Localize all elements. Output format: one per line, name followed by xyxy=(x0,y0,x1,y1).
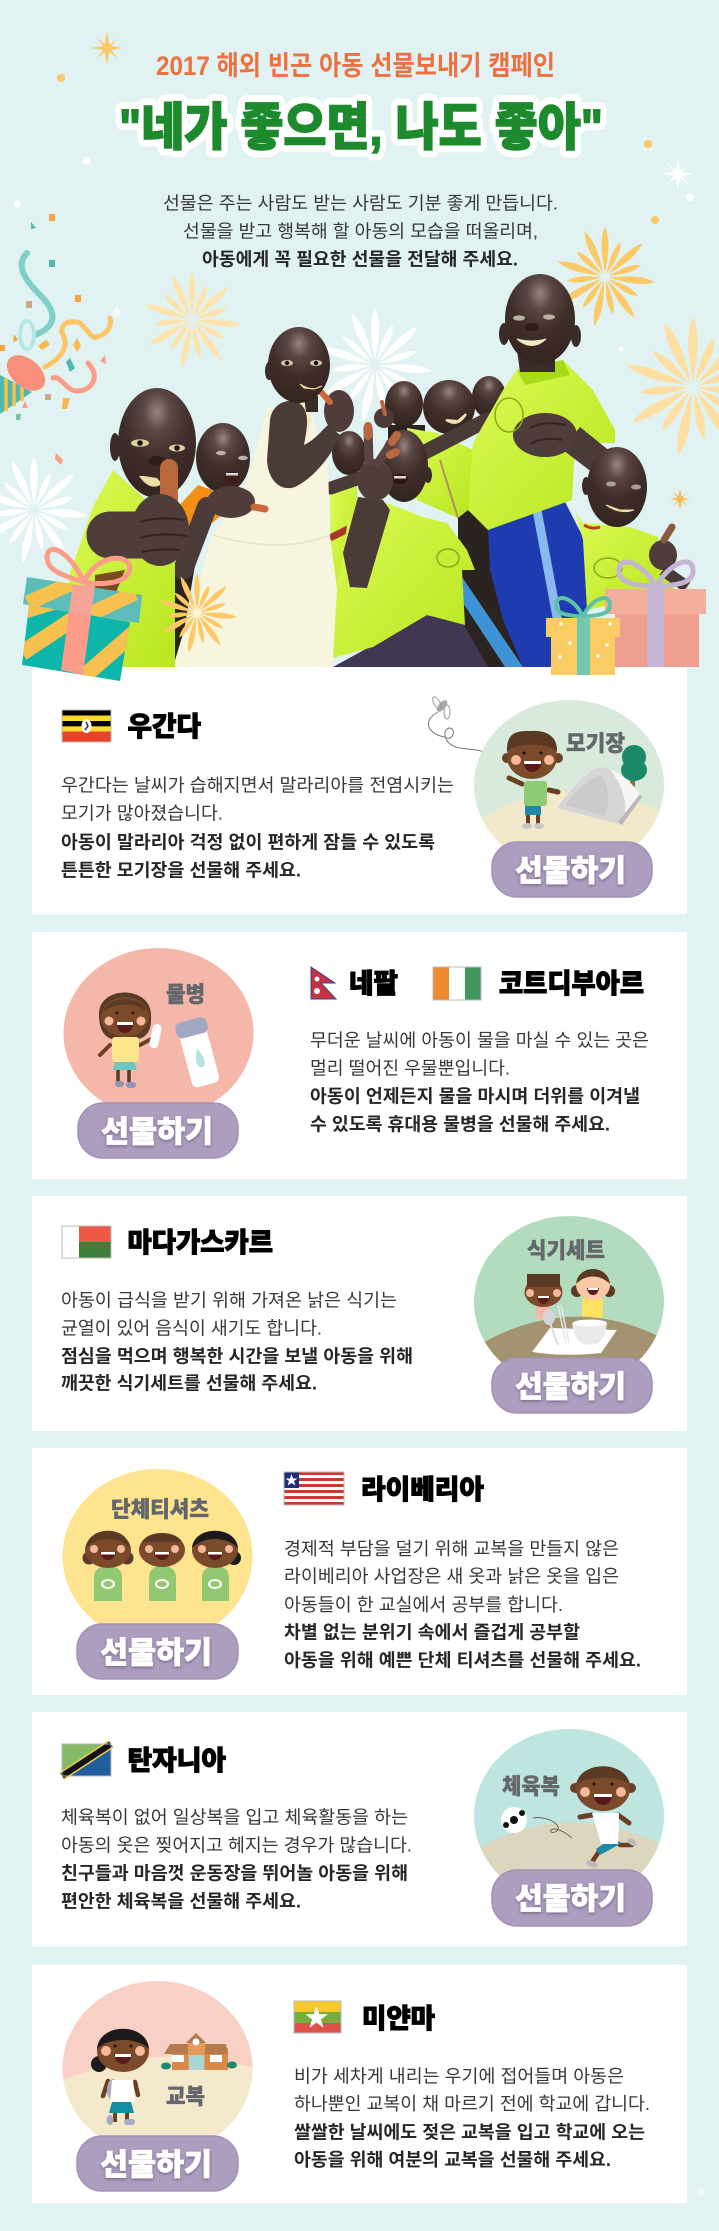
kid in white dress xyxy=(173,327,354,667)
gift: yellow box xyxy=(546,598,620,675)
body text: Liberia: 아동들이 한 교실에서 공부를 합니다. xyxy=(284,1595,563,1615)
school building xyxy=(161,2033,237,2070)
button: 선물하기 xyxy=(100,2149,212,2182)
body text: Nepal and Cote d'Ivoire: 무더운 날씨에 아동이 물을 마실 수 있는 곳은 xyxy=(310,1030,649,1050)
button: 선물하기 xyxy=(515,1371,626,1404)
label: 단체티셔츠 xyxy=(111,1497,209,1522)
heading: Cote d'Ivoire: 코트디부아르 xyxy=(499,969,644,999)
icon: mosquito with flight trail xyxy=(428,695,488,754)
body text: Liberia: 차별 없는 분위기 속에서 즐겁게 공부할 xyxy=(284,1622,580,1642)
campaign title: 2017 해외 빈곤 아동 선물보내기 캠페인 xyxy=(156,51,555,81)
label: 체육복 xyxy=(502,1774,560,1799)
flag: Cote d'Ivoire xyxy=(433,967,481,1000)
card: Uganda xyxy=(32,667,687,914)
group photo of children xyxy=(68,274,687,667)
body text: Uganda xyxy=(61,776,454,880)
heading: Myanmar: 미얀마 xyxy=(362,2004,435,2034)
body text: Tanzania: 체육복이 없어 일상복을 입고 체육활동을 하는 xyxy=(61,1808,408,1828)
button xyxy=(77,2136,238,2191)
label: 교복 xyxy=(166,2084,205,2109)
body text: Liberia xyxy=(284,1539,641,1670)
confetti popper and streamers xyxy=(0,214,110,465)
flag: Nepal xyxy=(311,967,336,999)
body text: Madagascar xyxy=(61,1290,413,1394)
illustration: water bottle xyxy=(64,948,254,1158)
body text: Nepal and Cote d'Ivoire xyxy=(310,1030,649,1134)
body text: Tanzania: 편안한 체육복을 선물해 주세요. xyxy=(61,1892,301,1912)
soccer ball xyxy=(501,1807,572,1838)
body text: Madagascar: 아동이 급식을 받기 위해 가져온 낡은 식기는 xyxy=(61,1290,397,1310)
button xyxy=(78,1103,238,1158)
flag: Madagascar xyxy=(62,1226,111,1258)
three children xyxy=(82,1531,241,1601)
label: 식기세트 xyxy=(527,1238,605,1263)
body text: Uganda: 우간다는 날씨가 습해지면서 말라리아를 전염시키는 xyxy=(61,776,454,796)
body text: Nepal and Cote d'Ivoire: 수 있도록 휴대용 물병을 선물해 주세요. xyxy=(310,1114,610,1134)
button xyxy=(492,842,652,897)
intro text: 아동에게 꼭 필요한 선물을 전달해 주세요. xyxy=(202,250,518,270)
illustration: gym clothes xyxy=(474,1729,664,1926)
tall kid xyxy=(468,274,617,667)
body text: Madagascar: 점심을 먹으며 행복한 시간을 보낼 아동을 위해 xyxy=(61,1346,413,1366)
heading: Uganda: 우간다 xyxy=(128,712,201,742)
illustration: group t-shirts xyxy=(62,1469,252,1679)
child running xyxy=(570,1766,638,1869)
heading: Nepal: 네팔 xyxy=(349,969,398,999)
card: Nepal and Cote d'Ivoire xyxy=(32,932,687,1179)
gift: striped box xyxy=(20,549,142,681)
card: Madagascar xyxy=(32,1196,687,1431)
kids in the back row xyxy=(330,376,506,610)
body text: Tanzania: 아동의 옷은 찢어지고 헤지는 경우가 많습니다. xyxy=(61,1836,412,1856)
intro text xyxy=(163,194,558,270)
body text: Madagascar: 균열이 있어 음식이 새기도 합니다. xyxy=(61,1318,322,1338)
body text: Madagascar: 깨끗한 식기세트를 선물해 주세요. xyxy=(61,1374,317,1394)
child xyxy=(502,731,563,829)
illustration: tableware set xyxy=(474,1216,664,1413)
button xyxy=(492,1358,652,1413)
body text: Liberia: 아동을 위해 예쁜 단체 티셔츠를 선물해 주세요. xyxy=(284,1650,641,1670)
card: Myanmar xyxy=(32,1965,687,2203)
body text: Uganda: 모기가 많아졌습니다. xyxy=(61,804,223,824)
tree xyxy=(621,745,647,793)
body text: Myanmar: 하나뿐인 교복이 채 마르기 전에 학교에 갑니다. xyxy=(294,2094,650,2114)
card: Tanzania xyxy=(32,1712,687,1946)
label: 모기장 xyxy=(566,731,625,756)
main headline: "네가 좋으면, 나도 좋아" xyxy=(119,99,603,156)
flag: Liberia xyxy=(284,1472,344,1505)
child with backpack xyxy=(91,2029,149,2125)
body text: Uganda: 튼튼한 모기장을 선물해 주세요. xyxy=(61,860,301,880)
illustration: school uniform xyxy=(62,1981,253,2191)
body text: Tanzania xyxy=(61,1808,412,1912)
button xyxy=(492,1870,652,1926)
heading: Madagascar: 마다가스카르 xyxy=(128,1228,273,1258)
child xyxy=(99,992,162,1088)
dark background between children xyxy=(163,500,530,667)
flag: Myanmar xyxy=(294,2001,341,2033)
kid with orange shirt xyxy=(177,423,265,570)
button: 선물하기 xyxy=(101,1116,213,1149)
fireworks xyxy=(0,227,719,564)
body text: Nepal and Cote d'Ivoire: 멀리 떨어진 우물뿐입니다. xyxy=(310,1058,510,1078)
body text: Nepal and Cote d'Ivoire: 아동이 언제든지 물을 마시며 더위를 이겨낼 xyxy=(310,1086,640,1106)
table xyxy=(484,1316,656,1362)
flag: Tanzania xyxy=(62,1744,111,1776)
label: 물병 xyxy=(166,982,205,1007)
button: 선물하기 xyxy=(100,1637,212,1670)
intro text: 선물을 받고 행복해 할 아동의 모습을 떠올리며, xyxy=(183,222,538,242)
body text: Myanmar: 쌀쌀한 날씨에도 젖은 교복을 입고 학교에 오는 xyxy=(294,2122,645,2142)
main headline: "네가 좋으면, 나도 좋아" xyxy=(119,99,603,156)
bottle xyxy=(174,1016,222,1089)
body text: Tanzania: 친구들과 마음껏 운동장을 뛰어놀 아동을 위해 xyxy=(61,1864,408,1884)
tent xyxy=(557,767,642,825)
body text: Myanmar: 아동을 위해 여분의 교복을 선물해 주세요. xyxy=(294,2150,611,2170)
heading: Tanzania: 탄자니아 xyxy=(128,1746,226,1776)
body text: Myanmar xyxy=(294,2066,650,2170)
flag: Uganda xyxy=(62,710,111,742)
heading: Liberia: 라이베리아 xyxy=(361,1475,484,1505)
right kid xyxy=(575,447,687,610)
center kid with V sign xyxy=(333,426,488,667)
button xyxy=(77,1624,238,1679)
body text: Myanmar: 비가 세차게 내리는 우기에 접어들며 아동은 xyxy=(294,2066,624,2086)
blue folder xyxy=(462,577,523,667)
card: Liberia xyxy=(32,1448,687,1695)
button: 선물하기 xyxy=(515,855,626,888)
small orange firework over photo xyxy=(158,573,237,653)
big kid with thumb up xyxy=(68,388,196,667)
children xyxy=(524,1269,615,1319)
intro text: 선물은 주는 사람도 받는 사람도 기분 좋게 만듭니다. xyxy=(163,194,558,214)
tray and bowl xyxy=(532,1305,617,1355)
button: 선물하기 xyxy=(515,1883,626,1916)
body text: Uganda: 아동이 말라리아 걱정 없이 편하게 잠들 수 있도록 xyxy=(61,832,435,852)
body text: Liberia: 경제적 부담을 덜기 위해 교복을 만들지 않은 xyxy=(284,1539,619,1559)
body text: Liberia: 라이베리아 사업장은 새 옷과 낡은 옷을 입은 xyxy=(284,1566,619,1586)
illustration: mosquito net xyxy=(474,700,664,897)
gift: pink box xyxy=(605,562,706,667)
